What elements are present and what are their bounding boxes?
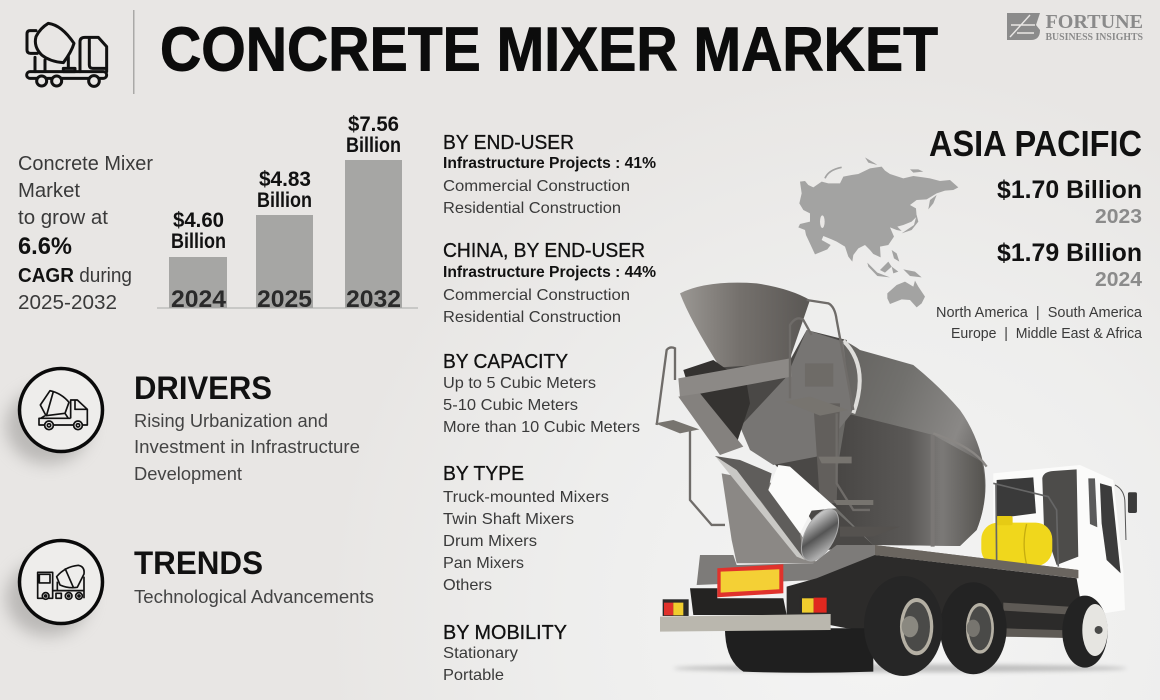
stat: 2023 value [997,176,1142,228]
icon: drivers circle [6,368,102,464]
text block: growth statement: 6.6% [18,233,72,260]
text block: drivers description [134,411,360,484]
bar 2032: Billion [346,134,401,157]
yellow tank [875,483,1078,578]
stat: 2023 value: 2023 [1095,206,1142,228]
panel: by end-user: Residential Construction [443,200,621,217]
panel: by mobility: BY MOBILITY [443,622,567,644]
panel: by end-user: BY END-USER [443,132,574,154]
panel: china by end-user: Infrastructure Projects : 44% [443,264,656,281]
stat: 2024 value: $1.79 Billion [997,239,1142,267]
panel: by type: Drum Mixers [443,533,537,550]
heading: trends: TRENDS [134,545,263,581]
text block: other regions: Europe | Middle East & Africa [951,325,1143,342]
panel: china by end-user [443,240,656,326]
panel: by mobility [443,622,567,684]
bar 2024 [169,209,227,313]
stat: 2024 value: 2024 [1095,269,1143,291]
text block: growth statement: to grow at [18,207,108,229]
heading: drivers: DRIVERS [134,370,272,406]
cab [993,465,1137,617]
panel: by type: BY TYPE [443,463,524,485]
heading: Asia Pacific: ASIA PACIFIC [929,123,1142,164]
bar 2032: $7.56 [348,113,399,136]
bar 2025: $4.83 [259,168,311,191]
icon: header mixer truck [27,23,107,86]
discharge chute [715,456,900,567]
icon: trends circle [6,540,102,636]
rear plate [717,564,783,597]
text block: other regions: North America | South America [936,304,1143,321]
bar 2025: Billion [257,189,312,212]
panel: by end-user: Commercial Construction [443,178,630,195]
mixer drum [813,338,986,546]
text block: other regions [936,304,1143,342]
frame and rails [655,300,873,525]
text block: growth statement: CAGR during [18,265,132,287]
bar 2032: 2032 [346,286,401,313]
wheels [864,576,1108,676]
stat: 2023 value: $1.70 Billion [997,176,1142,204]
panel: by mobility: Stationary [443,645,518,662]
header divider [133,10,134,94]
bar 2025: 2025 [257,286,312,313]
panel: by type [443,463,609,594]
illustration: concrete mixer truck [655,283,1137,676]
panel: by capacity [443,351,640,436]
logo: Fortune Business Insights: FORTUNE [1046,11,1143,33]
hopper [680,283,810,367]
logo: Fortune Business Insights [1007,11,1143,43]
panel: by capacity: BY CAPACITY [443,351,568,373]
logo: Fortune Business Insights: BUSINESS INSIGHTS [1046,32,1143,43]
text block: growth statement: Concrete Mixer [18,153,153,175]
panel: by type: Twin Shaft Mixers [443,511,574,528]
map: Asia Pacific [798,157,958,307]
bar chart [157,113,418,313]
panel: by type: Truck-mounted Mixers [443,489,609,506]
bar 2025 [256,168,313,313]
bar 2032 [345,113,402,313]
panel: by type: Pan Mixers [443,555,524,572]
bar 2024: 2024 [171,286,227,313]
text block: drivers description: Investment in Infrastructure [134,437,360,457]
bar 2024: $4.60 [173,209,224,232]
panel: china by end-user: Residential Construction [443,309,621,326]
bar 2024: Billion [171,230,226,253]
panel: china by end-user: Commercial Construction [443,287,630,304]
panel: by capacity: More than 10 Cubic Meters [443,419,640,436]
bumper [660,614,831,632]
text block: growth statement [18,153,153,314]
stat: 2024 value [997,239,1143,291]
tail lights [663,595,828,616]
panel: by capacity: 5-10 Cubic Meters [443,397,578,414]
chassis [787,555,1087,637]
text block: growth statement: 2025-2032 [18,292,117,314]
rear body [697,545,875,585]
panel: by end-user: Infrastructure Projects : 41% [443,155,656,172]
text block: drivers description: Development [134,464,242,484]
panel: by type: Others [443,577,492,594]
rear tyres [725,628,873,673]
panel: by mobility: Portable [443,667,504,684]
title: CONCRETE MIXER MARKET [160,16,938,84]
panel: by end-user [443,132,656,217]
panel: china by end-user: CHINA, BY END-USER [443,240,645,262]
panel: by capacity: Up to 5 Cubic Meters [443,375,596,392]
text block: trends description: Technological Advancements [134,587,374,607]
text block: drivers description: Rising Urbanization and [134,411,328,431]
dark backdrop behind mixer [720,330,877,550]
text block: growth statement: Market [18,180,80,202]
